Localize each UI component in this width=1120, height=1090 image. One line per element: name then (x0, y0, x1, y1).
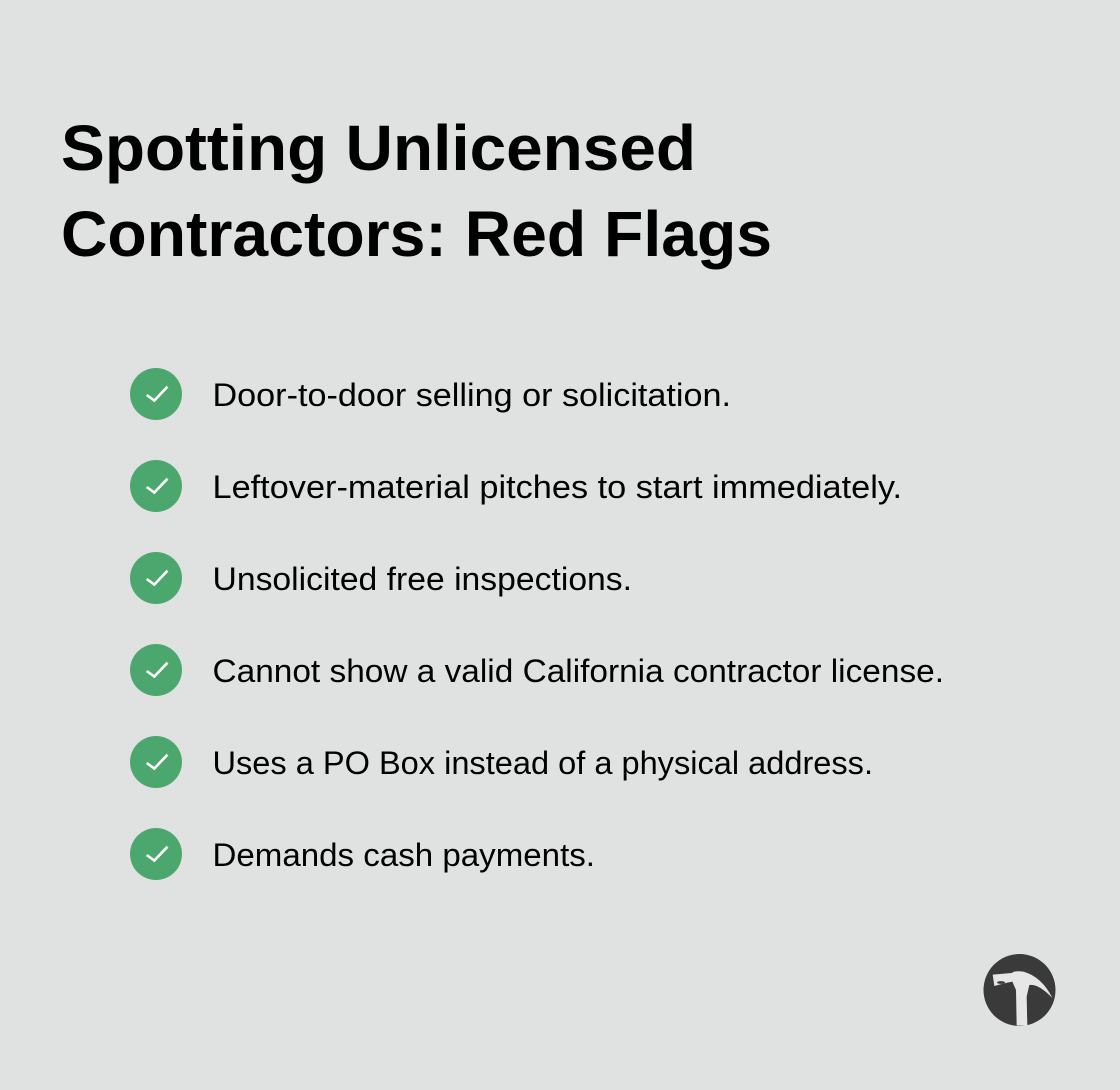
item: unsolicited inspections (130, 552, 632, 604)
title: Spotting Unlicensed (61, 112, 696, 184)
title (61, 112, 772, 270)
item: no valid license: Cannot show a valid California contractor license. (212, 653, 944, 689)
item: unsolicited inspections: Unsolicited free inspections. (212, 561, 632, 597)
checklist (130, 368, 944, 880)
title: Contractors: Red Flags (61, 198, 772, 270)
icon: hammer logo (984, 954, 1056, 1026)
item: leftover-material pitches: Leftover-material pitches to start immediately. (212, 469, 902, 505)
item: leftover-material pitches (130, 460, 902, 512)
item: no valid license (130, 644, 944, 696)
item: door-to-door selling (130, 368, 731, 420)
item: cash payments: Demands cash payments. (212, 837, 595, 873)
item: door-to-door selling: Door-to-door selling or solicitation. (212, 377, 731, 413)
item: PO Box address (130, 736, 873, 788)
item: PO Box address: Uses a PO Box instead of a physical address. (212, 745, 873, 781)
item: cash payments (130, 828, 595, 880)
